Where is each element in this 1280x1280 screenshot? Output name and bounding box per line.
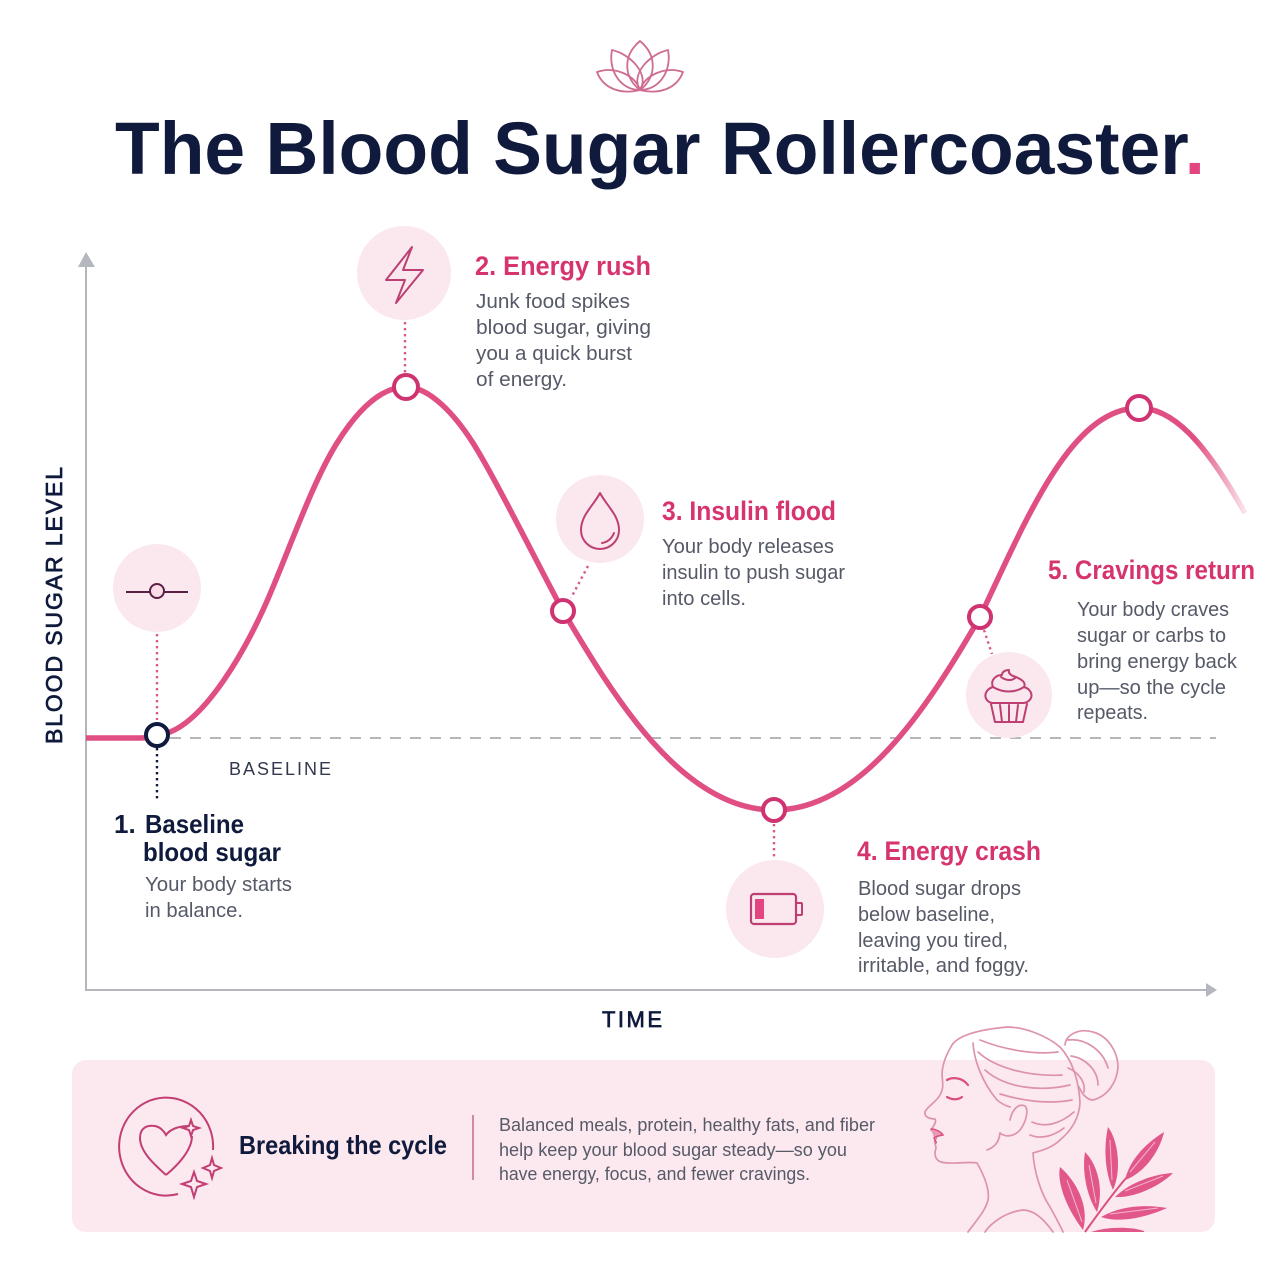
chart axes <box>78 252 1217 997</box>
step 5 text: sugar or carbs to <box>1077 625 1226 647</box>
panel text: have energy, focus, and fewer cravings. <box>499 1163 810 1184</box>
step 3 text: Your body releases <box>662 536 834 558</box>
step 5 text: up—so the cycle <box>1077 677 1226 699</box>
step 1 text: in balance. <box>145 900 243 922</box>
baseline: BASELINE <box>229 759 331 779</box>
step 1 text: Baseline <box>145 809 244 839</box>
illustration: leaves <box>1059 1127 1173 1232</box>
panel text: Balanced meals, protein, healthy fats, and fiber <box>499 1114 875 1135</box>
step 2 text: of energy. <box>476 369 567 391</box>
step 1 text: blood sugar <box>143 837 281 867</box>
step 2 text: Junk food spikes <box>476 291 630 313</box>
icon: lotus <box>597 41 683 92</box>
step 3 text: 3. Insulin flood <box>662 496 836 526</box>
step 4 text: 4. Energy crash <box>857 836 1041 866</box>
step 4 text: irritable, and foggy. <box>858 955 1029 977</box>
panel heading: Breaking the cycle <box>239 1130 447 1160</box>
step 1 text: Your body starts <box>145 874 292 896</box>
connector lines <box>157 322 992 858</box>
step 2 text: blood sugar, giving <box>476 317 651 339</box>
step 1 text: 1. <box>114 809 136 839</box>
step 2 text <box>475 251 651 391</box>
panel: breaking the cycle <box>72 1060 1215 1232</box>
step 5 text: bring energy back <box>1077 651 1238 673</box>
step 4 text: Blood sugar drops <box>858 878 1021 900</box>
step 3 text <box>662 496 845 610</box>
step 3 text: into cells. <box>662 588 746 610</box>
icon: droplet <box>556 475 644 563</box>
icon: lightning bolt <box>357 226 451 320</box>
panel text <box>499 1114 875 1184</box>
step 5 text <box>1048 555 1255 724</box>
x axis label: TIME <box>602 1007 662 1032</box>
icon: cupcake <box>966 652 1052 738</box>
step 3 text: insulin to push sugar <box>662 562 845 584</box>
illustration: woman profile <box>925 1027 1118 1232</box>
curve markers <box>146 375 1151 821</box>
step 5 text: repeats. <box>1077 702 1148 724</box>
step 4 text: leaving you tired, <box>858 930 1008 952</box>
step 2 text: 2. Energy rush <box>475 251 651 281</box>
icon: heart in circle <box>119 1098 221 1197</box>
step 4 text: below baseline, <box>858 904 995 926</box>
y axis label: BLOOD SUGAR LEVEL <box>41 467 67 744</box>
title: The Blood Sugar Rollercoaster. <box>115 107 1205 190</box>
step 4 text <box>857 836 1041 977</box>
icon: battery <box>726 860 824 958</box>
step 1 text <box>114 809 292 922</box>
icon: baseline marker <box>113 544 201 632</box>
panel text: help keep your blood sugar steady—so you <box>499 1139 847 1160</box>
step 2 text: you a quick burst <box>476 343 632 365</box>
step 5 text: Your body craves <box>1077 599 1229 621</box>
illustration: woman face details <box>931 1078 968 1143</box>
blood sugar curve <box>86 387 1245 810</box>
step 5 text: 5. Cravings return <box>1048 555 1255 585</box>
